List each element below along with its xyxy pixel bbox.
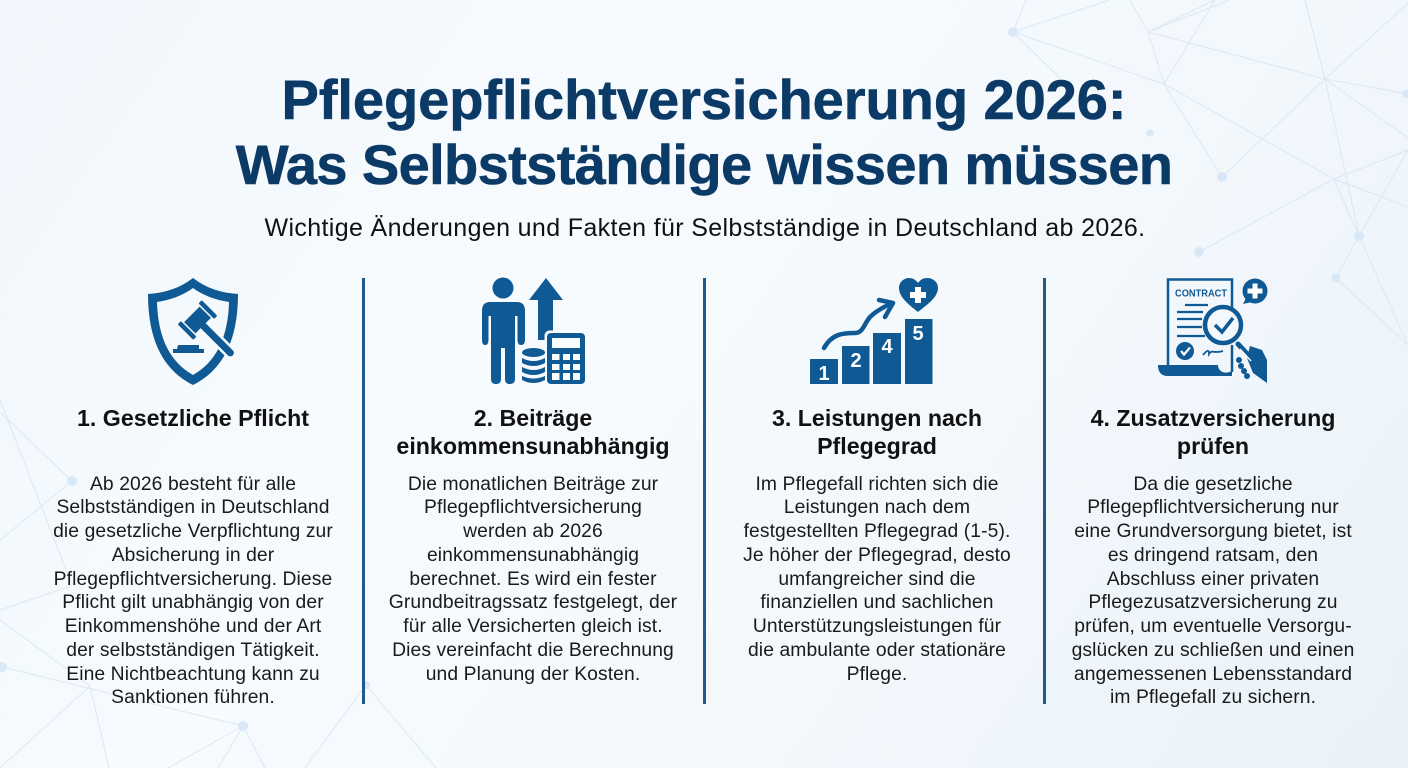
column divider 1 <box>362 278 364 704</box>
body text 3: finanziellen und sachlichen <box>760 592 994 613</box>
body text 4: gslücken zu schließen und einen <box>1072 640 1354 661</box>
heading 2 <box>396 405 670 459</box>
body text 2 <box>389 474 677 684</box>
body text 2: Die monatlichen Beiträge zur <box>408 474 658 494</box>
body text 3: Unterstützungsleistungen für <box>753 616 1001 637</box>
icon: care level steps with heart: 5 <box>912 323 924 345</box>
heading 2: einkommensunabhängig <box>396 433 670 459</box>
title: Pflegepflichtversicherung 2026: <box>282 68 1126 131</box>
body text 4: Da die gesetzliche <box>1133 474 1293 494</box>
body text 2: Pflegepflichtversicherung <box>424 497 642 518</box>
body text 4: es dringend ratsam, den <box>1108 545 1318 566</box>
heading 3: 3. Leistungen nach <box>772 405 982 431</box>
heading 1: 1. Gesetzliche Pflicht <box>77 405 309 431</box>
body text 3: Je höher der Pflegegrad, desto <box>743 545 1011 566</box>
body text 2: berechnet. Es wird ein fester <box>409 568 657 590</box>
body text 3: festgestellten Pflegegrad (1-5). <box>744 521 1010 542</box>
icon: care level steps with heart: 4 <box>881 336 893 358</box>
body text 1 <box>53 474 333 708</box>
body text 2: für alle Versicherten gleich ist. <box>403 616 663 637</box>
heading 3: Pflegegrad <box>817 433 937 459</box>
body text 1: Eine Nichtbeachtung kann zu <box>66 664 320 684</box>
body text 4: Pflegezusatzversicherung zu <box>1088 592 1338 613</box>
body text 1: Absicherung in der <box>112 545 274 566</box>
panel: Zusatzversicherung <box>1072 405 1354 708</box>
body text 1: Einkommenshöhe und der Art <box>65 616 321 637</box>
body text 1: die gesetzliche Verpflichtung zur <box>53 521 333 542</box>
body text 4: angemessenen Lebensstandard <box>1074 664 1352 684</box>
body text 3: Pflege. <box>847 664 907 684</box>
icon: care level steps with heart: 1 <box>818 363 830 385</box>
body text 4: eine Grundversorgung bietet, ist <box>1074 521 1352 542</box>
column divider 3 <box>1043 278 1046 704</box>
body text 1: Pflegepflichtversicherung. Diese <box>54 568 332 590</box>
body text 3: umfangreicher sind die <box>778 568 976 590</box>
body text 2: einkommensunabhängig <box>427 545 639 566</box>
body text 2: Dies vereinfacht die Berechnung <box>392 640 674 661</box>
body text 1: Pflicht gilt unabhängig von der <box>62 592 324 613</box>
title <box>235 68 1172 196</box>
body text 3: die ambulante oder stationäre <box>748 640 1006 661</box>
body text 3: Leistungen nach dem <box>784 497 970 518</box>
body text 1: der selbstständigen Tätigkeit. <box>66 640 320 661</box>
body text 2: werden ab 2026 <box>463 521 603 542</box>
body text 1: Selbstständigen in Deutschland <box>56 497 330 518</box>
body text 3 <box>743 474 1011 684</box>
body text 4: Pflegepflichtversicherung nur <box>1087 497 1339 518</box>
heading 4: 4. Zusatzversicherung <box>1091 405 1335 431</box>
body text 3: Im Pflegefall richten sich die <box>755 474 999 494</box>
column divider 2 <box>703 278 706 704</box>
panel: Beiträge <box>389 405 677 684</box>
panel: gesetzliche Pflicht <box>53 405 333 708</box>
body text 4: prüfen, um eventuelle Versorgu- <box>1074 616 1352 637</box>
body text 1: Sanktionen führen. <box>111 687 275 708</box>
body text 4: Abschluss einer privaten <box>1107 568 1319 590</box>
panel: Leistungen <box>743 405 1011 684</box>
heading 4: prüfen <box>1177 433 1249 459</box>
title: Was Selbstständige wissen müssen <box>236 133 1172 196</box>
heading 2: 2. Beiträge <box>474 405 592 431</box>
body text 4: im Pflegefall zu sichern. <box>1110 687 1316 708</box>
body text 2: und Planung der Kosten. <box>426 664 640 684</box>
subtitle: Wichtige Änderungen und Fakten für Selbstständige in Deutschland ab 2026. <box>264 214 1146 242</box>
body text 4 <box>1072 474 1354 708</box>
body text 2: Grundbeitragssatz festgelegt, der <box>389 592 677 613</box>
icon: care level steps with heart: 2 <box>850 350 862 372</box>
heading 3 <box>772 405 982 459</box>
body text 1: Ab 2026 besteht für alle <box>90 474 296 494</box>
icon: contract with magnifier: CONTRACT <box>1175 288 1228 300</box>
heading 4 <box>1090 405 1335 459</box>
